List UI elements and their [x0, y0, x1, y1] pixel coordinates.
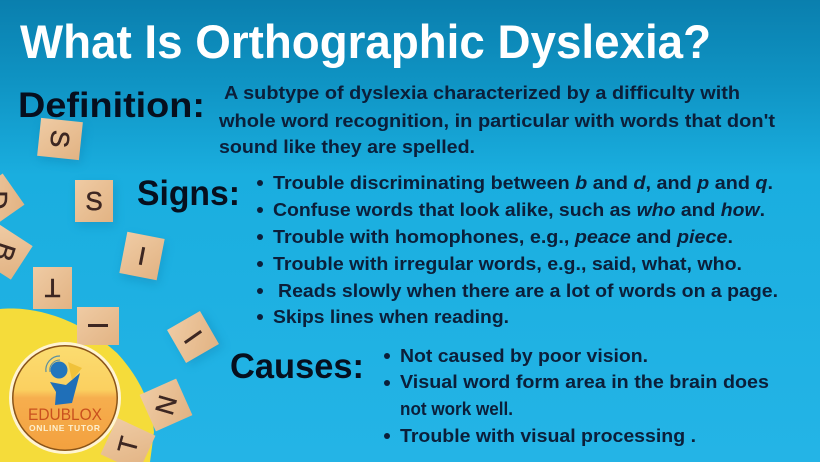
definition text — [218, 82, 775, 157]
causes list: Not caused by poor vision. — [400, 345, 648, 366]
tile: S middle — [75, 180, 115, 226]
causes list: Trouble with visual processing . — [400, 425, 696, 446]
tile: partial left D — [0, 174, 24, 226]
definition text: A subtype of dyslexia characterized by a difficulty with — [224, 82, 740, 103]
cause bullets — [384, 353, 390, 439]
tile: T: T — [44, 273, 60, 303]
causes list: Visual word form area in the brain does — [400, 371, 769, 392]
definition text: whole word recognition, in particular with words that don't — [218, 110, 775, 131]
letter tiles — [0, 118, 223, 462]
signs list: Confuse words that look alike, such as who and how. — [273, 199, 765, 220]
tile: N: N — [149, 392, 183, 418]
signs heading: Signs: — [137, 174, 240, 213]
signs list: Reads slowly when there are a lot of words on a page. — [278, 280, 778, 301]
tile: S top — [37, 118, 85, 163]
tile: S top: S — [44, 129, 76, 149]
causes heading: Causes: — [230, 347, 364, 386]
tile: B left — [0, 224, 33, 280]
tile: I right — [167, 310, 223, 366]
tile: S middle: S — [85, 186, 103, 216]
signs list: Trouble with homophones, e.g., peace and piece. — [273, 226, 733, 247]
definition heading: Definition: — [18, 86, 205, 125]
signs list: Trouble discriminating between b and d, and p and q. — [273, 172, 773, 193]
causes list: not work well. — [400, 398, 513, 419]
tile: T — [33, 267, 72, 309]
title: What Is Orthographic Dyslexia? — [20, 15, 711, 68]
logo: Edublox Online Tutor — [9, 342, 121, 454]
signs list — [257, 172, 778, 327]
logo text: EDUBLOX — [28, 405, 102, 424]
yellow paper shape — [0, 308, 154, 462]
signs list: Trouble with irregular words, e.g., said, what, who. — [273, 253, 742, 274]
logo: Edublox Online Tutor: ONLINE TUTOR — [29, 423, 100, 433]
tile: T bottom — [101, 418, 155, 462]
sign bullets — [257, 180, 263, 320]
tile: T bottom: T — [111, 433, 145, 457]
causes list — [384, 345, 769, 446]
signs list: Skips lines when reading. — [273, 306, 509, 327]
tile: I upper — [119, 232, 167, 285]
definition text: sound like they are spelled. — [219, 136, 475, 157]
icon: student figure — [46, 356, 82, 405]
tile: I flat — [77, 307, 119, 345]
tile: N — [140, 379, 192, 431]
